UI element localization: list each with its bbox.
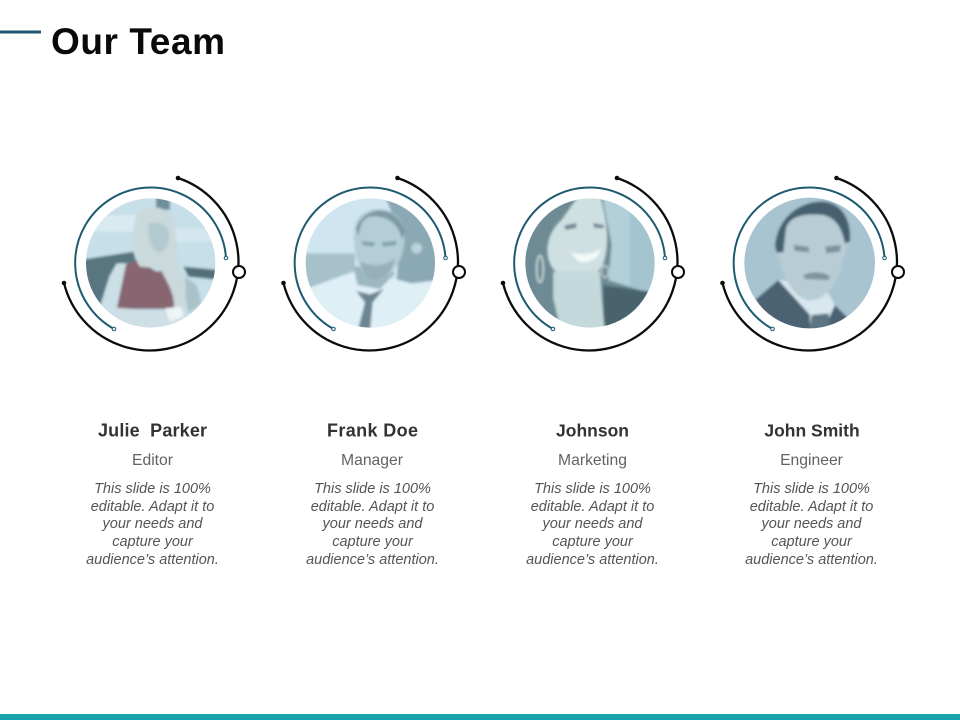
- ring node: [672, 266, 684, 278]
- description: your needs and: [542, 516, 643, 532]
- ring node: [233, 266, 245, 278]
- description: editable. Adapt it to: [91, 499, 214, 515]
- description: capture your: [771, 534, 853, 550]
- description: your needs and: [322, 516, 423, 532]
- photo: John Smith: [744, 198, 875, 328]
- name: Julie Parker: [98, 420, 207, 440]
- description: capture your: [332, 534, 414, 550]
- teal inner arc: [75, 188, 226, 329]
- text block: Frank Doe: [306, 420, 439, 568]
- description: This slide is 100%: [94, 481, 211, 497]
- team member portrait ring: Julie Parker: [62, 176, 245, 350]
- team member portrait ring: Johnson: [501, 176, 684, 350]
- description: audience’s attention.: [306, 552, 439, 568]
- description: audience’s attention.: [86, 552, 219, 568]
- team member portrait ring: Frank Doe: [281, 176, 465, 350]
- text block: Julie Parker: [86, 420, 219, 568]
- role: Manager: [341, 452, 403, 469]
- header accent line: [0, 30, 41, 34]
- description: audience’s attention.: [745, 552, 878, 568]
- description: This slide is 100%: [534, 481, 651, 497]
- description: editable. Adapt it to: [311, 499, 434, 515]
- ring node: [453, 266, 465, 278]
- description: audience’s attention.: [526, 552, 659, 568]
- team member portrait ring: John Smith: [720, 176, 904, 350]
- black outer arc: [503, 178, 677, 350]
- title: Our Team: [51, 21, 225, 62]
- name: John Smith: [764, 420, 860, 440]
- role: Editor: [132, 452, 173, 469]
- ring node: [892, 266, 904, 278]
- teal inner arc: [295, 188, 446, 329]
- black outer arc: [64, 178, 238, 350]
- description: This slide is 100%: [314, 481, 431, 497]
- photo: Julie Parker: [86, 198, 216, 328]
- description: This slide is 100%: [753, 481, 870, 497]
- description: capture your: [552, 534, 634, 550]
- role: Marketing: [558, 452, 627, 469]
- description: editable. Adapt it to: [750, 499, 873, 515]
- bottom bar: [0, 714, 960, 720]
- description: your needs and: [102, 516, 203, 532]
- role: Engineer: [780, 452, 843, 469]
- name: Johnson: [556, 420, 629, 440]
- description: editable. Adapt it to: [531, 499, 654, 515]
- text block: Johnson: [526, 420, 659, 568]
- teal inner arc: [514, 188, 665, 329]
- name: Frank Doe: [327, 420, 418, 440]
- description: capture your: [112, 534, 194, 550]
- description: your needs and: [761, 516, 862, 532]
- black outer arc: [284, 178, 458, 350]
- teal inner arc: [734, 188, 884, 329]
- text block: John Smith: [745, 420, 878, 568]
- black outer arc: [722, 178, 897, 350]
- photo: Frank Doe: [306, 198, 435, 328]
- photo: Johnson: [525, 198, 655, 328]
